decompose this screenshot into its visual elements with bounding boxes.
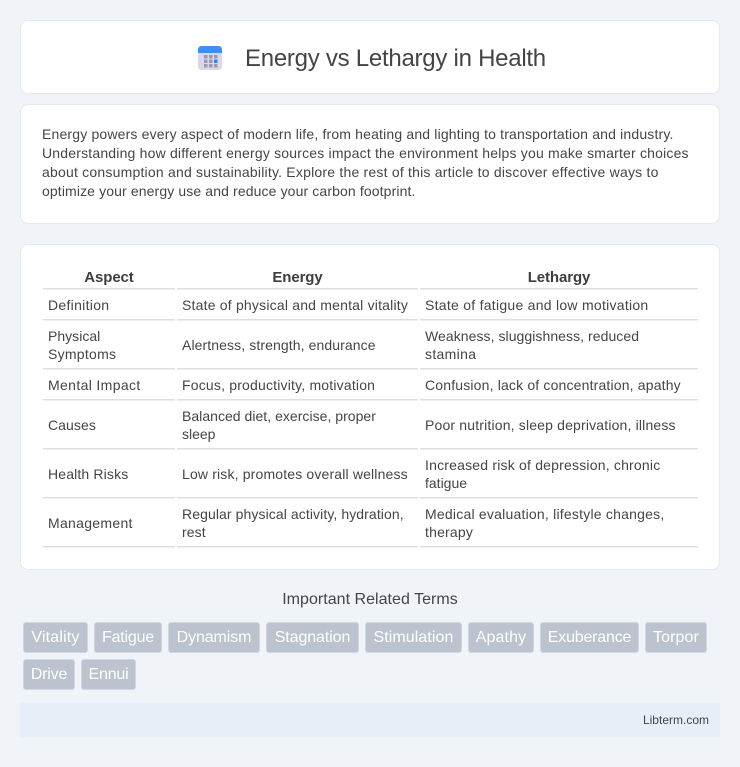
row: definition: State of physical and mental vitality [182, 297, 408, 313]
icon: calendar [198, 46, 222, 70]
tag: Stimulation: Stimulation [374, 629, 453, 646]
tag: Torpor: Torpor [653, 629, 699, 646]
row: mental impact: Confusion, lack of concentration, apathy [425, 377, 681, 393]
tag: Ennui: Ennui [89, 666, 128, 683]
row: physical symptoms: Alertness, strength, endurance [182, 337, 376, 353]
title: Energy vs Lethargy in Health [245, 45, 546, 72]
tag: Stagnation: Stagnation [275, 629, 350, 646]
comparison table [43, 269, 698, 548]
header panel [20, 20, 720, 94]
table header: Energy [272, 269, 323, 286]
tag: Fatigue [94, 622, 162, 653]
row: physical symptoms [48, 328, 639, 362]
intro paragraph: Understanding how different energy sources impact the environment helps you make smarter choices [42, 145, 689, 161]
row: causes: Causes [48, 417, 96, 433]
intro paragraph [42, 126, 689, 199]
table header [84, 269, 590, 286]
tag: Ennui [81, 659, 136, 690]
row: health risks [48, 457, 660, 491]
row: causes: Poor nutrition, sleep deprivation, illness [425, 417, 676, 433]
row: management [48, 506, 664, 540]
intro paragraph: optimize your energy use and reduce your carbon footprint. [42, 183, 416, 199]
row: causes: Balanced diet, exercise, proper [182, 408, 376, 424]
tag: Apathy: Apathy [476, 629, 526, 646]
row: health risks: Low risk, promotes overall wellness [182, 466, 408, 482]
table header: Aspect [84, 269, 134, 286]
tag: Vitality: Vitality [31, 629, 80, 646]
intro paragraph: Energy powers every aspect of modern life, from heating and lighting to transportation and industry. [42, 126, 674, 142]
related terms heading: Important Related Terms [282, 591, 458, 608]
row: causes: sleep [182, 426, 215, 442]
row: management: Management [48, 515, 133, 531]
tag: Stagnation [266, 622, 359, 653]
tag: Torpor [645, 622, 707, 653]
footer brand: Libterm.com [643, 713, 709, 727]
row: mental impact: Focus, productivity, motivation [182, 377, 375, 393]
tag: Exuberance: Exuberance [548, 629, 631, 646]
row: health risks: Health Risks [48, 466, 128, 482]
intro text panel [20, 104, 720, 224]
row: management: Medical evaluation, lifestyle changes, [425, 506, 664, 522]
row: management: therapy [425, 524, 473, 540]
row: management: rest [182, 524, 206, 540]
row: health risks: fatigue [425, 475, 467, 491]
row: definition: Definition [48, 297, 109, 313]
row: mental impact [48, 377, 681, 393]
tag: Dynamism [168, 622, 260, 653]
related terms tags [23, 622, 707, 690]
row: definition [48, 297, 648, 313]
intro paragraph: about consumption and sustainability. Explore the rest of this article to discover effective ways to [42, 164, 659, 180]
tag: Vitality [23, 622, 88, 653]
row: causes [48, 408, 676, 442]
tag: Apathy [468, 622, 534, 653]
row: physical symptoms: Weakness, sluggishness, reduced [425, 328, 639, 344]
row: physical symptoms: Symptoms [48, 346, 116, 362]
tag: Drive [23, 659, 75, 690]
row: physical symptoms: stamina [425, 346, 476, 362]
table header: Lethargy [528, 269, 590, 286]
row: mental impact: Mental Impact [48, 377, 141, 393]
tag: Drive: Drive [31, 666, 67, 683]
row: management: Regular physical activity, hydration, [182, 506, 404, 522]
tag: Fatigue: Fatigue [102, 629, 154, 646]
row: physical symptoms: Physical [48, 328, 100, 344]
tag: Dynamism: Dynamism [177, 629, 251, 646]
comparison table panel [20, 244, 720, 570]
tag: Stimulation [365, 622, 462, 653]
row: definition: State of fatigue and low motivation [425, 297, 648, 313]
footer bar [20, 703, 720, 737]
row: health risks: Increased risk of depression, chronic [425, 457, 660, 473]
tag: Exuberance [540, 622, 639, 653]
